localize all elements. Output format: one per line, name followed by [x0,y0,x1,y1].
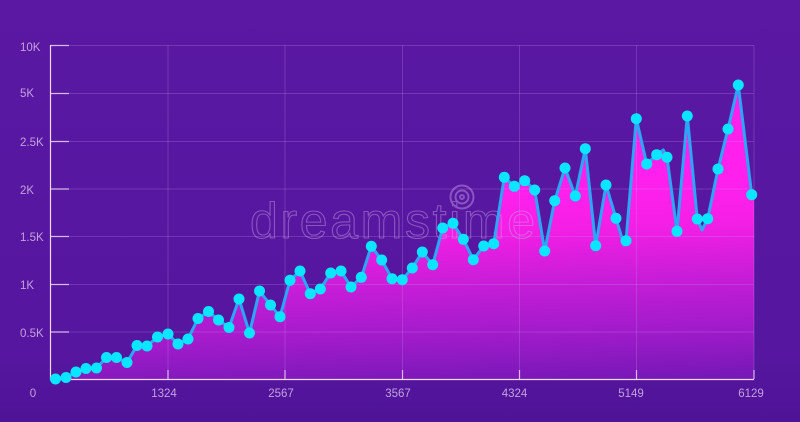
x axis labels: 2567 [268,388,294,400]
y axis labels: 2K [20,185,34,197]
y axis labels: 10K [20,42,41,54]
axis tick marks [50,46,754,379]
data line [56,85,752,379]
y axis labels: 0.5K [20,328,44,340]
data points [50,80,757,384]
watermark wordmark: dreamstime [250,193,535,249]
y axis labels: 1K [20,280,34,292]
x axis labels: 3567 [385,388,411,400]
y axis labels: 2.5K [20,137,44,149]
x axis labels: 5149 [618,388,644,400]
axes [50,45,754,380]
watermark spiral icon [450,186,474,208]
area fill under the line [50,85,754,379]
y axis labels: 1.5K [20,232,44,244]
x axis labels [30,388,764,400]
x axis labels: 0 [30,388,36,400]
y axis labels [20,42,44,340]
x axis labels: 1324 [151,388,177,400]
y axis labels: 5K [20,88,34,100]
x axis labels: 6129 [738,388,764,400]
grid lines [50,45,754,379]
watermark [250,186,535,249]
x axis labels: 4324 [502,388,528,400]
